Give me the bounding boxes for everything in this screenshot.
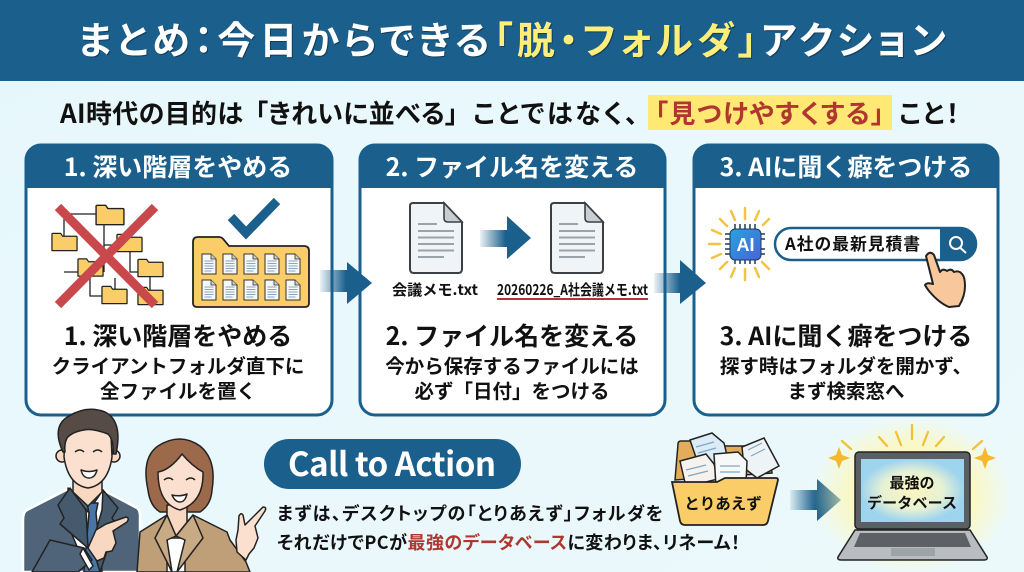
icon: check mark xyxy=(231,201,277,233)
icon: glowing laptop xyxy=(812,417,1012,572)
search box: A社の最新見積書 xyxy=(784,231,920,255)
icon: glowing laptop: データベース xyxy=(867,492,957,513)
arrow: rename xyxy=(480,216,531,259)
search box xyxy=(775,227,977,261)
step 1 heading: 1. 深い階層をやめる xyxy=(64,317,292,353)
icon: deep folder tree crossed out xyxy=(52,205,163,305)
panel: step 1 xyxy=(26,145,332,415)
step 1 description: 全ファイルを置く xyxy=(100,375,256,404)
call to action pill: Call to Action xyxy=(288,438,496,486)
icon: single folder with files xyxy=(193,237,309,307)
step 2 heading: 2. ファイル名を変える xyxy=(386,317,638,353)
step 2 header: 2. ファイル名を変える xyxy=(386,148,638,184)
step 3 header: 3. AIに聞く癖をつける xyxy=(720,148,972,184)
icon: magnifier xyxy=(950,237,966,253)
title banner: まとめ：今日からできる「脱・フォルダ」アクション xyxy=(78,10,946,65)
panel: step 3 xyxy=(694,145,998,415)
subtitle with highlight: 「見つけやすくする」 xyxy=(655,94,884,131)
panel: step 2 xyxy=(360,145,665,415)
title banner xyxy=(0,0,1024,81)
new filename with underline: 20260226_A社会議メモ.txt xyxy=(497,279,649,300)
step 1 description: クライアントフォルダ直下に xyxy=(52,350,304,379)
step 2 description: 今から保存するファイルには xyxy=(385,350,639,379)
icon: glowing laptop: 最強の xyxy=(889,472,935,493)
call to action message: まずは、デスクトップの「とりあえず」フォルダを xyxy=(277,500,663,526)
step 3 description: まず検索窓へ xyxy=(787,375,905,404)
icon: AI chip: AI xyxy=(736,235,754,255)
icon: renamed document xyxy=(551,203,603,273)
subtitle with highlight: AI時代の目的は xyxy=(59,94,243,131)
subtitle with highlight: こと！ xyxy=(899,94,959,131)
arrow: step 2 to step 3 xyxy=(654,260,706,304)
call to action message: それだけでPCが最強のデータベースに変わりま、リネーム！ xyxy=(277,529,740,555)
step 3 heading: 3. AIに聞く癖をつける xyxy=(720,317,972,353)
arrow: step 1 to step 2 xyxy=(320,262,372,304)
icon: AI chip xyxy=(709,208,769,280)
arrow: folder to laptop xyxy=(790,479,841,521)
subtitle with highlight: 「きれいに並べる」 xyxy=(255,94,458,131)
subtitle with highlight xyxy=(59,94,959,131)
icon: pointing hand xyxy=(925,253,965,307)
illustration: businessman xyxy=(23,409,140,572)
step 2 description: 必ず「日付」をつける xyxy=(414,375,610,404)
subtitle with highlight: ことではなく、 xyxy=(473,94,638,131)
illustration: businesswoman xyxy=(137,439,266,572)
icon: original document xyxy=(410,203,462,273)
original filename: 会議メモ.txt xyxy=(392,279,479,300)
step 3 description: 探す時はフォルダを開かず、 xyxy=(720,350,972,379)
step 1 header: 1. 深い階層をやめる xyxy=(64,148,292,184)
icon: messy とりあえず folder: とりあえず xyxy=(684,492,762,514)
icon: messy とりあえず folder xyxy=(672,433,779,525)
